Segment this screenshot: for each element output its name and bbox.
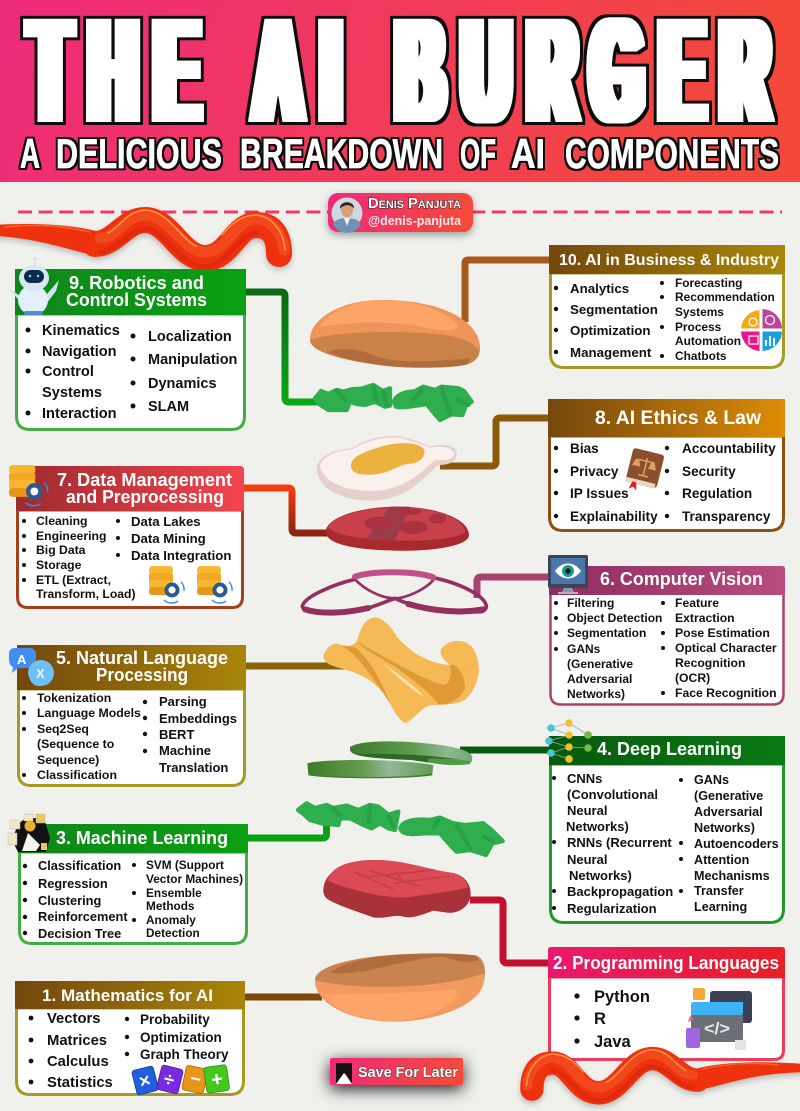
list right: Feature — [675, 596, 719, 610]
panel: 1 Mathematics — [15, 981, 245, 1095]
list left — [26, 323, 120, 422]
list left — [554, 281, 658, 360]
author badge: @denis-panjuta — [368, 214, 462, 228]
list left: Calculus — [47, 1054, 109, 1070]
list left: (Convolutional — [567, 787, 658, 802]
list right: Vector Machines) — [146, 872, 243, 886]
icon: ai scientist — [8, 814, 50, 852]
list right: Data Lakes — [131, 514, 201, 529]
burger: pickle slices — [307, 741, 472, 778]
list left: GANs — [567, 642, 601, 656]
list left: Optimization — [570, 323, 651, 338]
header banner — [0, 0, 800, 182]
author badge: Denis Panjuta — [368, 195, 461, 212]
list left — [23, 858, 128, 941]
heading: 1. Mathematics for AI — [42, 986, 213, 1005]
list left: Decision Tree — [38, 926, 121, 941]
subtitle: A — [20, 130, 40, 177]
list: Java — [594, 1033, 632, 1051]
list left: Privacy — [570, 464, 619, 479]
save for later button — [330, 1058, 463, 1085]
list left: Explainability — [570, 509, 658, 524]
list right: Graph Theory — [140, 1047, 229, 1062]
list right — [665, 441, 776, 524]
list left: Tokenization — [37, 691, 111, 705]
list left: Vectors — [47, 1011, 100, 1027]
list right: Face Recognition — [675, 686, 777, 700]
icon: data header — [9, 465, 48, 506]
panel: 7 Data — [9, 465, 244, 608]
burger: lettuce lower — [298, 803, 503, 855]
list left: Matrices — [47, 1033, 107, 1049]
list left: ETL (Extract, — [36, 573, 111, 587]
heading — [56, 648, 228, 685]
heading: 4. Deep Learning — [597, 739, 742, 759]
list right — [130, 329, 237, 415]
list right: Methods — [146, 899, 195, 913]
heading: Control Systems — [66, 289, 207, 310]
list right: Embeddings — [159, 711, 237, 726]
list right: Automation — [675, 334, 741, 348]
icon: math cards — [131, 1064, 230, 1095]
list right: Optimization — [140, 1030, 222, 1045]
list left: CNNs — [567, 771, 602, 786]
list left: Networks) — [567, 687, 625, 701]
list right: Data Mining — [131, 531, 206, 546]
icon: math cards: × — [137, 1070, 153, 1093]
panel: 8 Ethics — [548, 399, 785, 530]
list left: Object Detection — [567, 611, 662, 625]
list left: Filtering — [567, 596, 614, 610]
list left: Backpropagation — [567, 884, 673, 899]
list right: SVM (Support — [146, 858, 224, 872]
list left: Clustering — [38, 893, 101, 908]
panel: 2 Programming — [548, 947, 785, 1060]
list right — [143, 694, 237, 775]
subtitle: AI — [511, 130, 545, 177]
connector 8 — [440, 418, 548, 466]
ketchup squiggle top — [0, 210, 285, 267]
list left: Networks) — [566, 819, 629, 834]
list left: Regression — [38, 876, 108, 891]
list left: Classification — [37, 768, 117, 782]
burger: salami — [326, 507, 469, 551]
list right: Systems — [675, 305, 724, 319]
list left: Transform, Load) — [36, 587, 136, 601]
list left: Systems — [42, 385, 102, 401]
list right: Learning — [694, 900, 747, 914]
list right — [661, 596, 777, 700]
list right: Regulation — [682, 486, 752, 501]
list left: Engineering — [36, 529, 106, 543]
connector 6 — [477, 577, 549, 598]
panel: 3 Machine Learning — [8, 814, 248, 944]
heading: 3. Machine Learning — [56, 828, 228, 848]
list right: Dynamics — [148, 376, 217, 392]
list right: Parsing — [159, 694, 207, 709]
list: R — [594, 1010, 606, 1028]
list right: BERT — [159, 727, 194, 742]
panel: 9 Robotics — [9, 258, 246, 430]
icon: data 2 — [197, 566, 232, 603]
icon: data 1 — [149, 566, 184, 603]
list right: Forecasting — [675, 276, 742, 290]
list left: Neural — [567, 803, 607, 818]
connector 2 — [470, 900, 548, 963]
list left: Storage — [36, 558, 82, 572]
list left — [22, 691, 141, 782]
list left: Classification — [38, 858, 121, 873]
panel: 4 Deep Learning — [545, 719, 785, 922]
heading: and Preprocessing — [66, 487, 224, 507]
heading: 7. Data Management — [57, 470, 232, 490]
heading: 10. AI in Business & Industry — [559, 252, 779, 269]
list right: Extraction — [675, 611, 735, 625]
burger: cheese — [323, 617, 479, 723]
list right: Networks) — [694, 821, 755, 835]
list right: Transparency — [682, 509, 771, 524]
icon: translate bubbles: A — [17, 652, 27, 667]
list right: Machine — [159, 743, 211, 758]
list: Python — [594, 988, 650, 1006]
icon: neural network — [545, 719, 592, 763]
list right: Optical Character — [675, 641, 777, 655]
list right: Translation — [159, 760, 228, 775]
heading: 2. Programming Languages — [553, 953, 779, 973]
list left: Statistics — [47, 1075, 113, 1091]
list right: Autoencoders — [694, 837, 779, 851]
list left: Neural — [567, 852, 607, 867]
list left: RNNs (Recurrent — [567, 835, 672, 850]
list left — [29, 1011, 113, 1091]
list left: Bias — [570, 441, 599, 456]
list right: Recognition — [675, 656, 745, 670]
list right: (Generative — [694, 789, 763, 803]
icon: code window — [686, 988, 752, 1050]
burger: lettuce upper — [315, 385, 472, 420]
list left: Sequence) — [37, 753, 99, 767]
connector 10 — [465, 260, 549, 322]
list left: Big Data — [36, 543, 86, 557]
subtitle — [20, 130, 779, 177]
list right — [116, 514, 231, 563]
ketchup squiggle bottom — [526, 1050, 800, 1101]
list right: Localization — [148, 329, 232, 345]
icon: business quadrants — [741, 309, 782, 351]
connector 7 — [244, 488, 332, 533]
subtitle: OF — [460, 130, 496, 177]
panel: 10 Business — [549, 245, 785, 368]
heading: 6. Computer Vision — [600, 569, 763, 589]
connector 4 — [460, 746, 549, 754]
connector 1 — [245, 994, 322, 1000]
list left: Control — [42, 364, 94, 380]
list left: Interaction — [42, 406, 117, 422]
panel: 5 NLP — [9, 645, 246, 786]
list left: Reinforcement — [38, 909, 128, 924]
list right: Ensemble — [146, 886, 202, 900]
icon: math cards: − — [188, 1068, 203, 1091]
list left — [554, 596, 662, 701]
subtitle: BREAKDOWN — [240, 130, 443, 177]
list right: Transfer — [694, 884, 744, 898]
icon: translate bubbles: X — [36, 666, 45, 681]
list left: Language Models — [37, 706, 141, 720]
icon: monitor eye — [548, 555, 588, 594]
list left: Segmentation — [570, 302, 658, 317]
icon: math cards: ÷ — [161, 1069, 176, 1092]
list left: Analytics — [570, 281, 629, 296]
list left: (Generative — [567, 657, 633, 671]
list right: SLAM — [148, 399, 189, 415]
list left: Regularization — [567, 901, 657, 916]
list right: Detection — [146, 926, 200, 940]
list left: Cleaning — [36, 514, 87, 528]
burger: patty — [323, 860, 471, 918]
heading: Processing — [96, 665, 188, 685]
icon: robot — [9, 258, 59, 315]
icon: law book — [624, 448, 665, 495]
connector 3 — [248, 822, 326, 838]
list right: Recommendation — [675, 290, 775, 304]
burger: fried egg — [317, 436, 457, 501]
list left: (Sequence to — [37, 737, 115, 751]
heading — [57, 470, 232, 507]
heading: 9. Robotics and — [69, 272, 204, 293]
list right: Data Integration — [131, 548, 231, 563]
list right: Chatbots — [675, 349, 727, 363]
list right: (OCR) — [675, 671, 710, 685]
list right: Manipulation — [148, 352, 237, 368]
heading: 5. Natural Language — [56, 648, 228, 668]
list left: Networks) — [569, 868, 632, 883]
list — [574, 988, 650, 1051]
list left: Seq2Seq — [37, 722, 89, 736]
list right — [660, 276, 775, 363]
burger: bottom bun — [315, 953, 485, 1022]
list right — [132, 858, 243, 940]
icon: translate bubbles — [9, 648, 54, 686]
panel: 6 Computer Vision — [548, 555, 785, 704]
list left — [552, 771, 673, 916]
connector 5 — [246, 662, 350, 670]
connector 9 — [246, 292, 325, 402]
burger: onion ring — [302, 572, 486, 613]
list right — [125, 1012, 229, 1062]
list right: Adversarial — [694, 805, 763, 819]
list right: Anomaly — [146, 913, 196, 927]
list right — [679, 773, 779, 914]
list left: Adversarial — [567, 672, 632, 686]
list left: Segmentation — [567, 626, 646, 640]
burger: top bun — [310, 300, 480, 368]
list left: IP Issues — [570, 486, 629, 501]
save for later button: Save For Later — [358, 1065, 458, 1081]
subtitle: DELICIOUS — [56, 130, 222, 177]
list right: Accountability — [682, 441, 776, 456]
list right: Attention — [694, 853, 749, 867]
list right: Probability — [140, 1012, 210, 1027]
list left: Kinematics — [42, 323, 120, 339]
heading: 8. AI Ethics & Law — [595, 408, 761, 429]
heading — [66, 272, 207, 310]
list right: Mechanisms — [694, 869, 770, 883]
list left: Navigation — [42, 344, 117, 360]
list right: Pose Estimation — [675, 626, 770, 640]
list left: Management — [570, 345, 652, 360]
icon: code window: </> — [704, 1019, 730, 1038]
list right: GANs — [694, 773, 729, 787]
icon: math cards: + — [210, 1068, 224, 1092]
list left — [22, 514, 136, 601]
list left — [554, 441, 658, 524]
list right: Security — [682, 464, 736, 479]
list right: Process — [675, 320, 722, 334]
author badge — [328, 193, 473, 233]
